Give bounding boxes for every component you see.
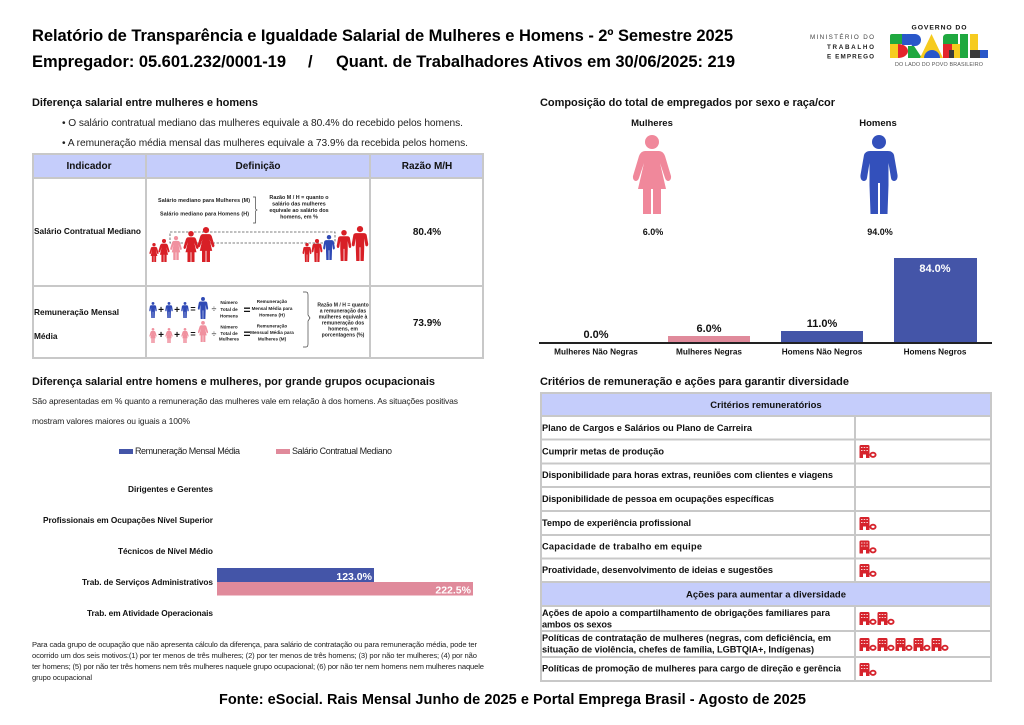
- bar chart: grupos ocupacionais: [43, 484, 473, 618]
- text block: nota de rodapé: Para cada grupo de ocupação que não apresenta cálculo da diferença, para salário de contratação ou para remuneração média, pode ter: [32, 640, 477, 649]
- logo: Governo do Brasil: [890, 24, 988, 68]
- text block: bullets: • O salário contratual mediano das mulheres equivale a 80.4% do recebido pelos homens.: [62, 118, 463, 129]
- text block: nota de rodapé: grupo ocupacional: [32, 673, 92, 682]
- diagram: remuneração média: Remuneração: [257, 324, 287, 328]
- bar chart: composição por raça: 6.0%: [696, 323, 722, 335]
- criteria rows: Cumprir metas de produção: [542, 446, 664, 456]
- text block: explicação: [32, 396, 458, 426]
- heading: diferença salarial: Diferença salarial entre mulheres e homens: [32, 97, 258, 109]
- row: salário contratual mediano: Salário Contratual Mediano: [34, 226, 141, 236]
- criteria rows: Plano de Cargos e Salários ou Plano de Carreira: [542, 423, 753, 433]
- diagram: salário mediano: equivale ao salário dos: [269, 208, 329, 214]
- fonte: Fonte: eSocial. Rais Mensal Junho de 2025 e Portal Emprega Brasil - Agosto de 2025: [219, 692, 806, 708]
- bar chart: composição por raça: 0.0%: [583, 329, 609, 341]
- diagram: remuneração média: +: [158, 330, 164, 341]
- table header: Razão M/H: [402, 161, 452, 172]
- criteria rows: Capacidade de trabalho em equipe: [542, 542, 702, 552]
- logo: Governo do Brasil: GOVERNO DO: [912, 24, 966, 32]
- bar chart: grupos ocupacionais: Trab. em Atividade Operacionais: [87, 608, 213, 618]
- heading: critérios: Critérios de remuneração e ações para garantir diversidade: [540, 376, 849, 388]
- icon: mulheres: Mulheres: [631, 118, 673, 129]
- row: remuneração mensal média: Remuneração Mensal: [34, 307, 119, 317]
- bar chart: composição por raça: Mulheres Não Negras: [554, 348, 638, 356]
- table header: Definição: [235, 161, 281, 172]
- icon: mulheres: [631, 118, 673, 237]
- bar chart: grupos ocupacionais: 123.0%: [336, 571, 373, 583]
- diagram: remuneração média: =: [190, 329, 196, 339]
- diagram: remuneração média: =: [243, 303, 251, 317]
- action rows: Ações de apoio a compartilhamento de obrigações familiares para: [542, 608, 831, 618]
- action rows: Políticas de promoção de mulheres para cargo de direção e gerência: [542, 664, 842, 674]
- diagram: remuneração média: +: [174, 305, 180, 316]
- diagram: remuneração média: Homens (H): [259, 312, 285, 318]
- diagram: remuneração média: Total de: [220, 307, 238, 312]
- logo: Ministério do Trabalho e Emprego: [810, 32, 874, 60]
- title: /: [308, 53, 313, 71]
- diagram: remuneração média: Razão M / H = quanto: [317, 302, 369, 308]
- table header: [66, 161, 452, 172]
- diagram: remuneração média: Mensual Média para: [250, 330, 294, 335]
- table header: Indicador: [66, 161, 112, 172]
- diagram: remuneração média: Mulheres (M): [258, 336, 287, 342]
- icons: empresa: [860, 445, 948, 676]
- bar chart: composição por raça: 11.0%: [807, 318, 838, 330]
- action rows: situação de violência, chefes de família, LGBTQIA+, Indígenas): [542, 644, 814, 654]
- diagram: remuneração média: =: [243, 327, 251, 341]
- panel: tabela de indicadores: [33, 154, 483, 358]
- icon: homens: 94.0%: [867, 227, 893, 237]
- criteria rows: Disponibilidade de pessoa em ocupações específicas: [542, 494, 774, 504]
- diagram: salário mediano: salário das mulheres: [272, 202, 326, 208]
- diagram: salário mediano: Salário mediano para Mulheres (M): [158, 198, 250, 204]
- panel: critérios e ações: [541, 393, 991, 681]
- title: Quant. de Trabalhadores Ativos em 30/06/2025: 219: [336, 53, 735, 71]
- diagram: remuneração média: ÷: [212, 304, 217, 314]
- diagram: remuneração média: +: [174, 330, 180, 341]
- bar chart: composição por raça: 84.0%: [919, 263, 951, 275]
- title: Relatório de Transparência e Igualdade Salarial de Mulheres e Homens - 2º Semestre 2025: [32, 27, 733, 45]
- diagram: remuneração média: mulheres equivale à: [319, 314, 368, 320]
- diagram: salário mediano: Salário mediano para Homens (H): [160, 212, 249, 218]
- bar chart: composição por raça: [539, 258, 992, 356]
- icon: homens: [859, 118, 898, 237]
- row: remuneração mensal média: 73.9%: [413, 318, 441, 329]
- text block: explicação: mostram valores maiores ou iguais a 100%: [32, 416, 190, 426]
- diagram: remuneração média: Mulheres: [219, 336, 240, 342]
- icon: mulheres: 6.0%: [643, 227, 663, 237]
- text block: bullets: [62, 118, 468, 149]
- icon: homens: Homens: [859, 118, 897, 129]
- legend: Salário Contratual Mediano: [292, 446, 392, 456]
- row: salário contratual mediano: 80.4%: [413, 227, 441, 238]
- diagram: remuneração média: [149, 292, 369, 347]
- bar chart: composição por raça: Mulheres Negras: [676, 348, 742, 356]
- criteria rows: Tempo de experiência profissional: [542, 518, 691, 528]
- text block: nota de rodapé: ocorrido um dos seis motivos:(1) por ter menos de três mulheres; (2) por ter menos de três homens; (3) por não ter mulheres; (4) por não: [32, 651, 477, 660]
- diagram: remuneração média: a remuneração das: [320, 308, 366, 314]
- table header: critérios remuneratórios: Critérios remuneratórios: [710, 400, 822, 411]
- diagram: remuneração média: +: [158, 305, 164, 316]
- bar chart: composição por raça: Homens Negros: [904, 348, 967, 356]
- heading: diferença por grupos ocupacionais: Diferença salarial entre homens e mulheres, por grande grupos ocupacionais: [32, 376, 435, 388]
- bar chart: composição por raça: Homens Não Negros: [782, 348, 863, 356]
- logo: Ministério do Trabalho e Emprego: TRABALHO: [827, 44, 874, 51]
- diagram: salário mediano: Razão M / H = quanto o: [269, 195, 329, 201]
- action rows: ambos os sexos: [542, 620, 612, 630]
- title: Empregador: 05.601.232/0001-19: [32, 53, 286, 71]
- bar chart: grupos ocupacionais: Dirigentes e Gerentes: [128, 484, 213, 494]
- title: [32, 27, 735, 71]
- legend: [119, 446, 392, 456]
- row: remuneração mensal média: Média: [34, 331, 58, 341]
- bar chart: grupos ocupacionais: Trab. de Serviços Administrativos: [82, 577, 213, 587]
- action rows: Políticas de contratação de mulheres (negras, com deficiência, em: [542, 633, 831, 643]
- text block: explicação: São apresentadas em % quanto a remuneração das mulheres vale em relação à dos homens. As situações positivas: [32, 396, 458, 406]
- text block: nota de rodapé: [32, 640, 484, 682]
- diagram: remuneração média: homens, em: [328, 326, 358, 332]
- text block: bullets: • A remuneração média mensal das mulheres equivale a 73.9% da recebida pelos homens.: [62, 138, 468, 149]
- logo: Governo do Brasil: DO LADO DO POVO BRASILEIRO: [895, 62, 983, 68]
- diagram: remuneração média: =: [190, 304, 196, 314]
- criteria rows: Disponibilidade para horas extras, reuniões com clientes e viagens: [542, 470, 833, 480]
- text block: nota de rodapé: ter homens; (5) por não ter três homens nem três mulheres naquele grupo ocupacional; (6) por não ter nem homens nem mulheres naquele: [32, 662, 484, 671]
- diagram: remuneração média: remuneração dos: [322, 320, 364, 326]
- criteria rows: [542, 423, 833, 575]
- diagram: remuneração média: Total de: [220, 331, 238, 336]
- logo: Ministério do Trabalho e Emprego: MINISTÉRIO DO: [810, 32, 874, 41]
- diagram: salário mediano: homens, em %: [280, 214, 318, 220]
- diagram: remuneração média: porcentagens (%): [322, 332, 365, 338]
- bar chart: grupos ocupacionais: 222.5%: [435, 584, 472, 596]
- row: salário contratual mediano: [34, 226, 441, 238]
- diagram: remuneração média: Número: [220, 300, 238, 305]
- bar chart: grupos ocupacionais: Técnicos de Nível Médio: [118, 546, 213, 556]
- table header: ações: Ações para aumentar a diversidade: [686, 590, 846, 600]
- diagram: remuneração média: Mensal Média para: [252, 306, 293, 311]
- diagram: remuneração média: Número: [220, 324, 238, 330]
- legend: Remuneração Mensal Média: [135, 446, 240, 456]
- heading: composição: Composição do total de empregados por sexo e raça/cor: [540, 97, 836, 109]
- diagram: remuneração média: Remuneração: [257, 299, 287, 304]
- logo: Ministério do Trabalho e Emprego: E EMPREGO: [827, 54, 874, 60]
- diagram: remuneração média: ÷: [212, 329, 217, 339]
- bar chart: grupos ocupacionais: Profissionais em Ocupações Nível Superior: [43, 515, 214, 525]
- row: remuneração mensal média: [34, 307, 441, 341]
- action rows: [542, 608, 842, 674]
- criteria rows: Proatividade, desenvolvimento de ideias e sugestões: [542, 565, 773, 575]
- diagram: salário mediano: [149, 195, 368, 262]
- diagram: remuneração média: Homens: [220, 314, 239, 318]
